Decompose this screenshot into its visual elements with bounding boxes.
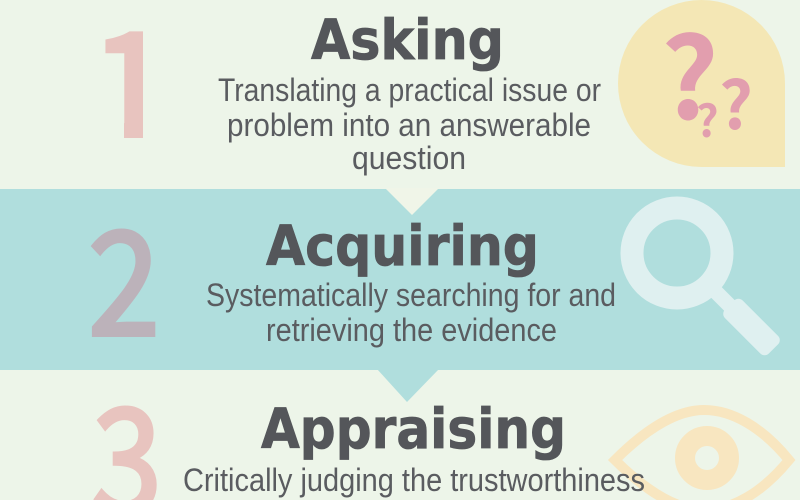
icon: speech bubble with question marks: ? (719, 53, 753, 149)
number 2: 2 (88, 169, 160, 377)
panel: step 2 band with notch and pointer (0, 188, 800, 402)
heading: Appraising: Appraising (261, 397, 566, 461)
description: Acquiring: Systematically searching for and (206, 277, 616, 313)
description: Appraising: Critically judging the trustworthiness (183, 462, 645, 498)
heading: Asking: Asking (311, 8, 504, 72)
icon: speech bubble with question marks: ? (696, 86, 719, 150)
panel: step 1 asking (91, 0, 785, 179)
icon: speech bubble with question marks (618, 0, 785, 167)
description: Acquiring (206, 277, 616, 348)
heading: Acquiring: Acquiring (266, 214, 539, 278)
icon: eye (615, 410, 789, 500)
description: Asking (218, 72, 601, 176)
icon: magnifying glass (632, 208, 782, 358)
pointer pointing down to step 3 (377, 369, 439, 402)
panel: step 3 appraising (92, 346, 789, 500)
notch pointing down from step 1 (385, 188, 439, 215)
teal band (0, 189, 800, 370)
description: Acquiring: retrieving the evidence (266, 312, 557, 348)
description: Asking: problem into an answerable (227, 107, 591, 143)
panel: step 2 acquiring (88, 169, 782, 377)
description: Asking: question (352, 140, 466, 176)
description: Asking: Translating a practical issue or (218, 72, 601, 108)
